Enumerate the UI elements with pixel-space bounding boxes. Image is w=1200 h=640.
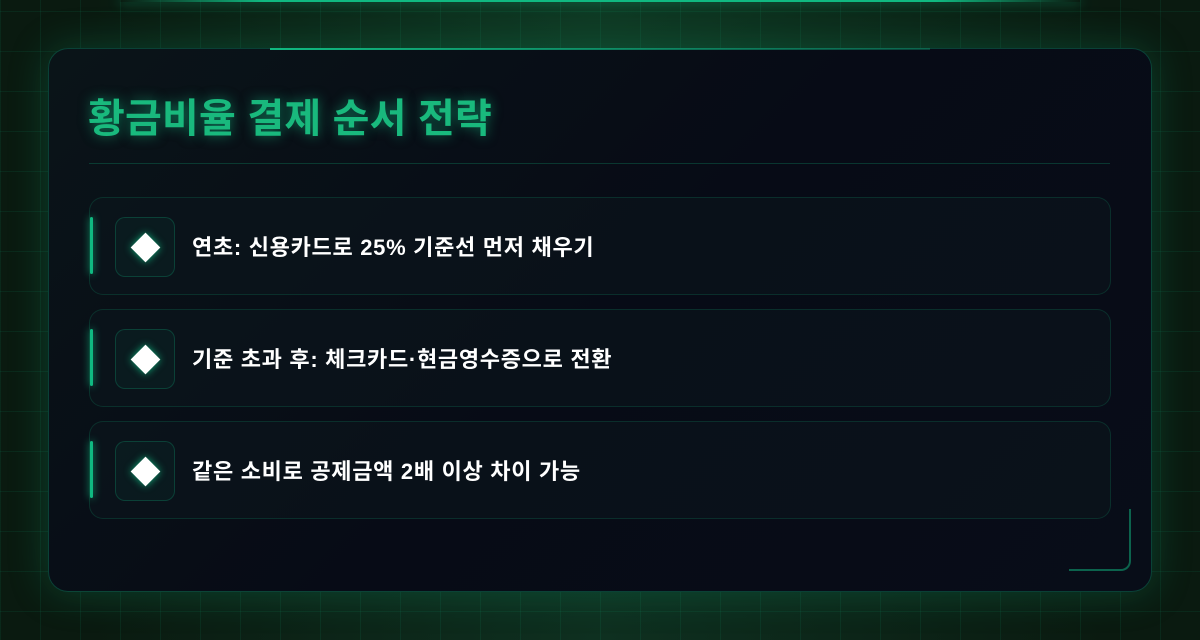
item 3 [89, 421, 1111, 519]
corner bracket [1069, 509, 1131, 571]
text 3: 같은 소비로 공제금액 2배 이상 차이 가능 [192, 459, 581, 484]
panel: main card [48, 48, 1152, 592]
text 2: 기준 초과 후: 체크카드·현금영수증으로 전환 [192, 347, 612, 372]
item 2 [89, 309, 1111, 407]
icon: diamond [115, 329, 175, 389]
text 1: 연초: 신용카드로 25% 기준선 먼저 채우기 [192, 235, 594, 260]
item 1 [89, 197, 1111, 295]
icon: diamond [115, 217, 175, 277]
icon: diamond [115, 441, 175, 501]
title: 황금비율 결제 순서 전략 [88, 97, 492, 141]
